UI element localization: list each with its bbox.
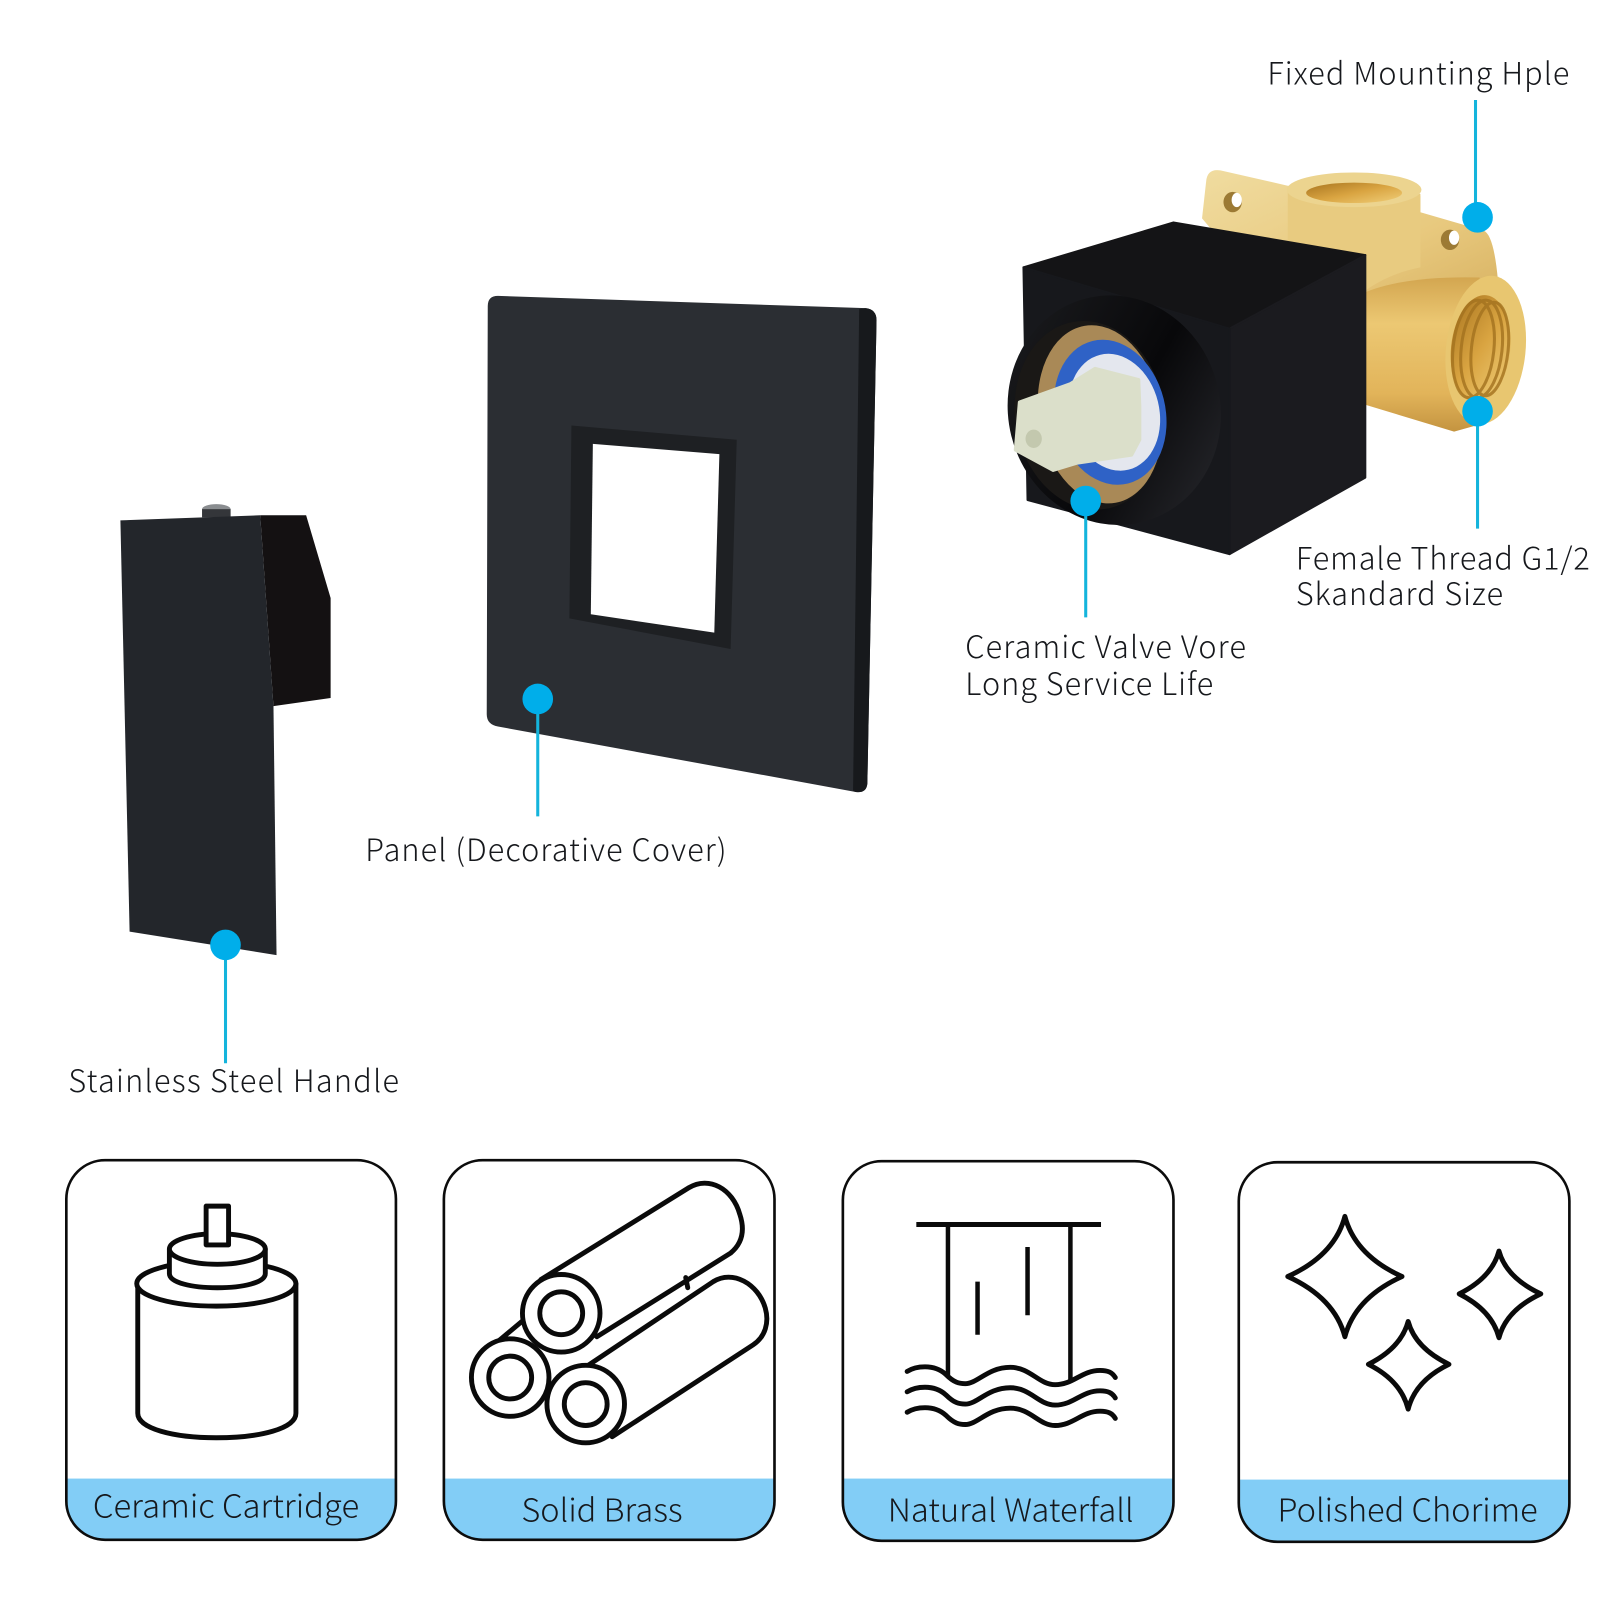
callout: panel decorative cover: Panel (Decorative Cover) [365,825,727,870]
callout: stainless steel handle: Stainless Steel Handle [68,1056,399,1101]
icon: cartridge cylinder [137,1206,296,1438]
panel: solid brass [444,1160,774,1540]
callout: ceramic valve core: Ceramic Valve Vore [965,622,1246,667]
product photo: decorative cover panel [487,296,877,792]
callout: fixed mounting hole [1267,49,1569,233]
icon: sparkles [1288,1216,1541,1409]
caption: Ceramic Cartridge [93,1481,359,1527]
callout: ceramic valve core: Long Service Life [965,659,1213,704]
icon: waterfall [907,1224,1115,1426]
callout: panel decorative cover [365,684,727,870]
product photo: black valve cube with ceramic core [983,222,1365,554]
panel: ceramic cartridge [66,1160,396,1540]
caption: Solid Brass [521,1485,683,1531]
product photo: brass valve body [1202,170,1533,432]
callout: female thread [1296,396,1590,614]
panel: polished chrome [1239,1162,1569,1542]
caption: Natural Waterfall [888,1485,1134,1531]
product photo: stainless steel handle [120,504,331,955]
callout: stainless steel handle [68,930,399,1101]
callout: ceramic valve core [965,486,1246,704]
callout: female thread: Skandard Size [1296,569,1503,614]
callout: fixed mounting hole: Fixed Mounting Hple [1267,49,1569,94]
caption: Polished Chorime [1278,1485,1538,1531]
callout: female thread: Female Thread G1/2 [1296,533,1590,578]
icon: brass tubes [471,1183,767,1443]
panel: natural waterfall [843,1161,1173,1541]
